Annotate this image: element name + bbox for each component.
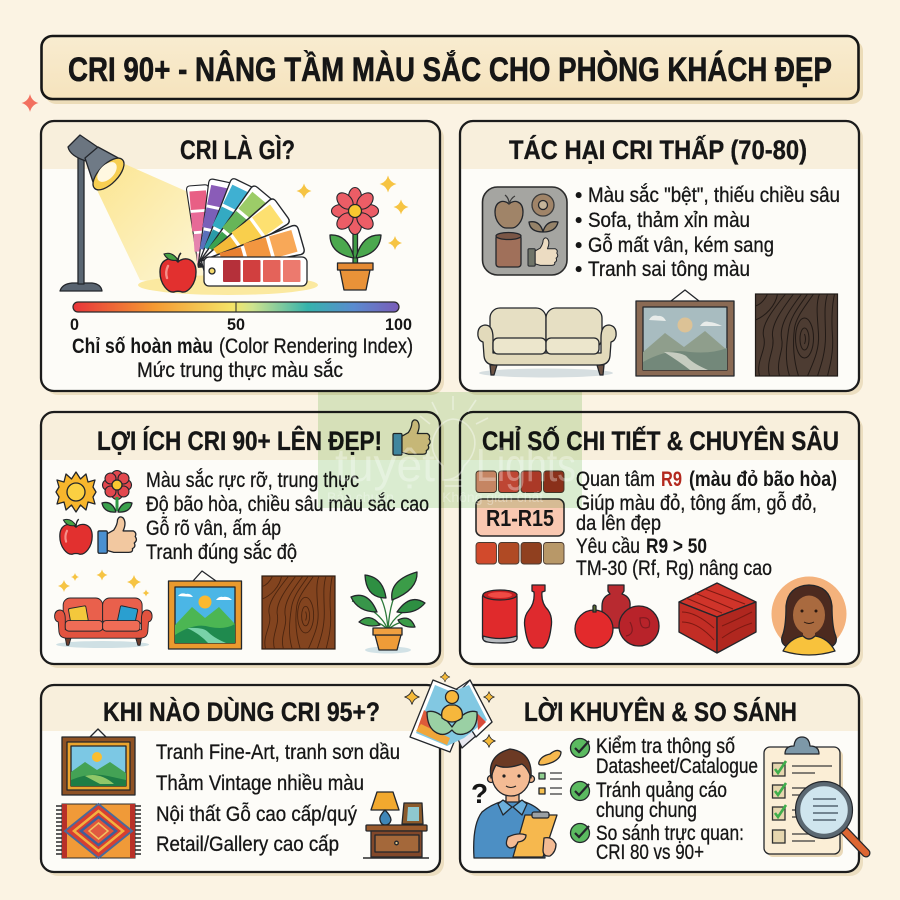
text: bullet list: • [575,209,582,232]
icon: thumbs up [98,517,136,553]
text: bullet list: • [575,258,582,281]
text: R9 details: da lên đẹp [576,512,661,535]
panel: tác hại CRI thấp [460,121,863,395]
text: benefits: Gỗ rõ vân, ấm áp [146,517,281,540]
text: bullet list: Gỗ mất vân, kém sang [588,234,774,257]
text: definition: (Color Rendering Index) [219,335,413,358]
icon: vintage rug [56,804,141,858]
watermark: Tuyet Lights: Không gian chất [442,489,543,505]
text: R9 details: TM-30 (Rf, Rg) nâng cao [576,557,772,580]
text: use cases: Thảm Vintage nhiều màu [156,772,364,795]
icon: red can [482,590,517,643]
panel: lợi ích CRI 90+ [41,412,444,668]
text: advice: CRI 80 vs 90+ [596,841,704,864]
icon: red vase [524,585,552,648]
text: advice: Tránh quảng cáo [596,779,727,802]
swatches: red strip [476,471,564,492]
text: advice: So sánh trực quan: [596,822,744,845]
badge: R1-R15 [476,499,564,536]
icon: dull objects tile [482,187,567,275]
text: benefits [146,469,429,564]
heading: chỉ số: CHỈ SỐ CHI TIẾT & CHUYÊN SÂU [482,424,839,456]
icon: dull landscape picture [636,290,734,376]
text: benefits: Độ bão hòa, chiều sâu màu sắc cao [146,493,429,516]
chart: CRI gradient scale [73,302,399,312]
icon: red apple small [60,519,92,554]
swatches: warm strip [476,542,564,564]
icon: thumbs up heading [393,420,430,455]
text: bullet list: Sofa, thảm xỉn màu [588,209,750,232]
text: benefits: Màu sắc rực rỡ, trung thực [146,469,359,492]
panel: khi nào dùng CRI 95+ [41,685,444,876]
text: advice: Kiểm tra thông số [596,735,735,758]
title banner [42,36,863,104]
scale labels: 0 [70,315,79,334]
icons: badge sparkles [404,672,496,748]
text: R9 details: (màu đỏ bão hòa) [689,468,837,491]
icon: red bottle, apple, pomegranate [575,585,659,648]
icon: vivid wood texture [262,576,335,649]
heading: lợi ích: LỢI ÍCH CRI 90+ LÊN ĐẸP! [97,425,382,456]
text: bullet list: Màu sắc "bệt", thiếu chiều sâu [588,184,840,207]
panel: chỉ số chi tiết [460,412,863,668]
icon: colour swatch fan [186,177,307,286]
heading: CRI là gì: CRI LÀ GÌ? [180,134,295,165]
icon: dull sofa [478,308,616,378]
icon: mini checklist [539,750,562,794]
icons: sparkles over sofa [58,570,150,596]
panel: lời khuyên và so sánh [460,685,866,876]
heading: tác hại: TÁC HẠI CRI THẤP (70-80) [509,134,807,165]
text: use cases: Tranh Fine-Art, tranh sơn dầu [156,741,400,764]
icon: side table with lamp and frame [363,792,429,858]
icon: vivid landscape picture [168,571,242,649]
illustration: light pool [138,275,318,295]
icon: fine art frame [62,729,135,795]
icon: overlapping photos badge [410,680,492,752]
text: advice: Datasheet/Catalogue [596,755,758,778]
watermark: Tuyet Lights: Bản chuẩn [327,489,394,505]
heading: lời khuyên: LỜI KHUYÊN & SO SÁNH [524,696,797,727]
icon: dull wood texture [756,294,838,376]
text: use cases: Retail/Gallery cao cấp [156,833,339,856]
icon: clipboard checklist with magnifier [764,737,866,857]
text: definition: Chỉ số hoàn màu [72,335,213,358]
illustration: lamp beam [97,161,205,283]
icon: portrait [772,576,846,655]
icons: sparkles [296,176,408,250]
heading: khi nào: KHI NÀO DÙNG CRI 95+? [103,696,380,727]
text: definition [72,335,413,382]
icon: question mark: ? [471,778,488,809]
text: use cases [156,741,400,856]
text: bullet list: Tranh sai tông màu [588,258,750,281]
text: definition: Mức trung thực màu sắc [137,359,343,382]
icon: floor lamp [60,135,129,291]
scale labels [70,315,412,334]
text: R9 details: Yêu cầu [576,535,640,558]
icons: check circles [570,738,590,842]
text: bullet list [575,184,840,281]
text: R9 details: R9 [661,468,682,491]
icon: potted flower [330,188,381,290]
text: R9 details: R9 > 50 [646,535,707,558]
icon: red flower [102,470,132,512]
scale labels: 50 [227,315,245,334]
text: advice [596,735,758,864]
icon: red apple [160,253,196,292]
icon: man with clipboard [474,749,557,858]
watermark: Tuyet Lights: Lights [476,439,576,491]
watermark: Tuyet Lights [318,392,582,508]
icon: red wood block [679,583,756,653]
text: use cases: Nội thất Gỗ cao cấp/quý [156,803,357,826]
icon: sun [56,472,96,512]
badge: R1-R15: R1-R15 [486,505,554,531]
icon: potted plant [351,572,425,654]
text: benefits: Tranh đúng sắc độ [146,541,297,564]
text: R9 details: Quan tâm [576,468,655,491]
text: bullet list: • [575,234,582,257]
scale labels: 100 [385,315,412,334]
text: advice: chung chung [596,799,697,822]
text: R9 details: Giúp màu đỏ, tông ấm, gỗ đỏ, [576,492,817,515]
icon: vivid red sofa [55,598,152,648]
icon: coral sparkle [22,94,38,112]
text: bullet list: • [575,184,582,207]
watermark: Tuyet Lights: tuyệt [335,439,435,491]
panel: CRI là gì [41,121,444,395]
text: R9 details [576,468,837,580]
